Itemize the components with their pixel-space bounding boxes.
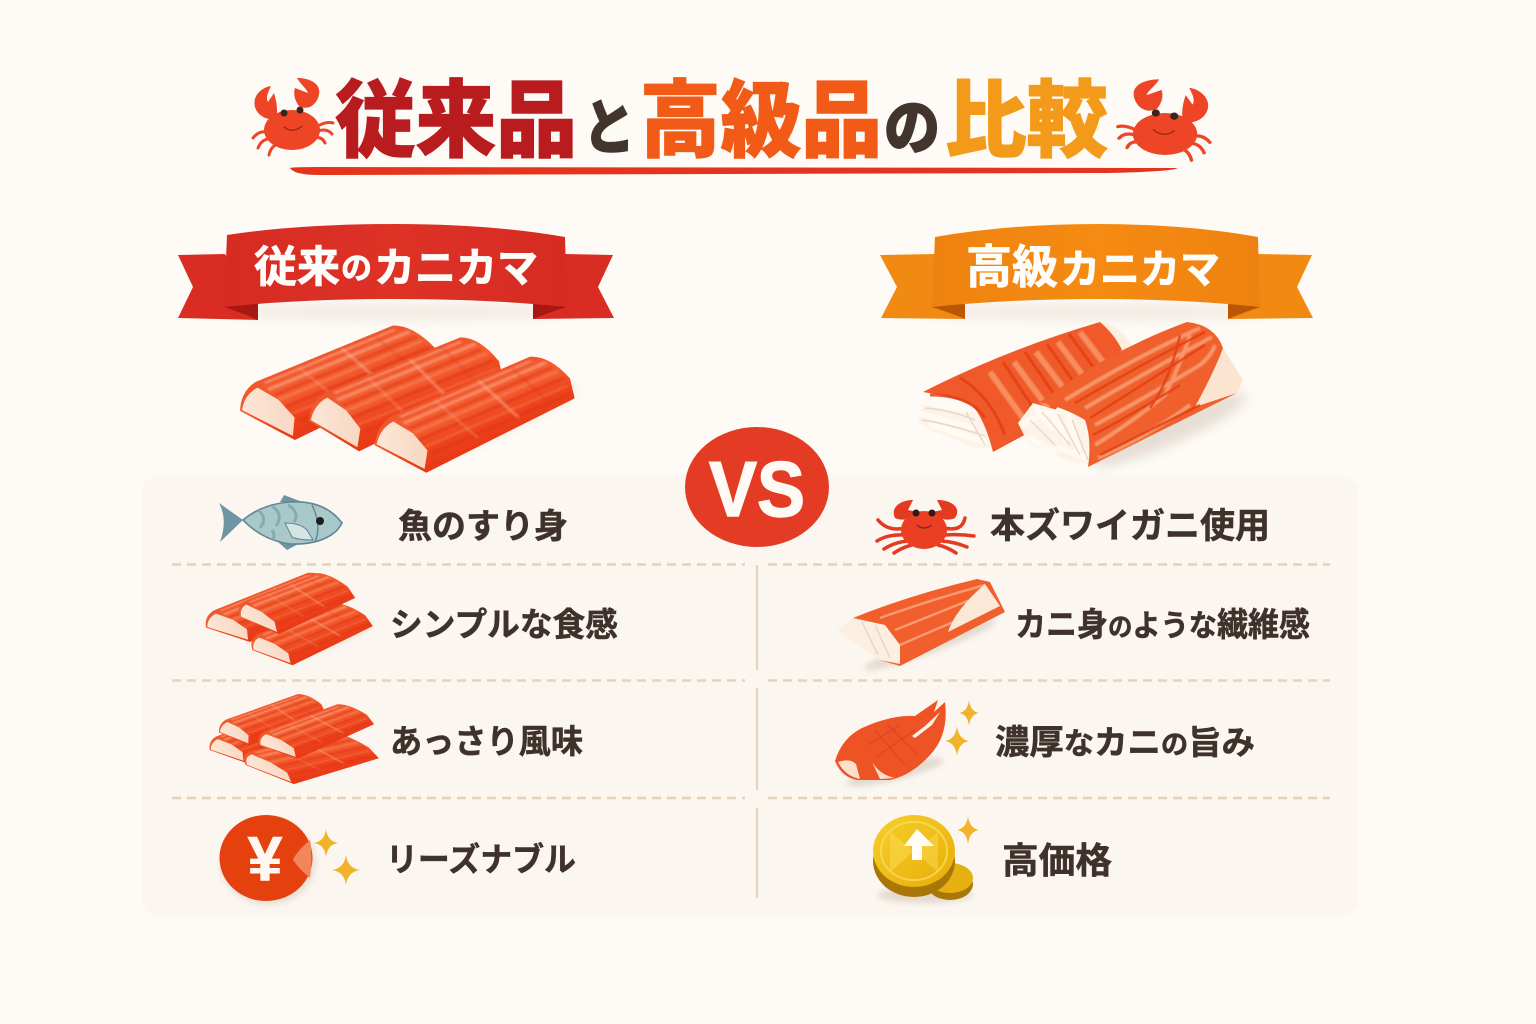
title icon: right crab [1118, 79, 1210, 160]
row 2 left: text: シンプルな食感 [390, 606, 618, 643]
ribbon text: conventional: 従来 [254, 244, 340, 292]
row 4 left: text: リーズナブル [386, 841, 576, 878]
sparkle [957, 816, 979, 844]
ribbon: premium [880, 224, 1313, 320]
row 1 left: fish icon [219, 495, 342, 550]
row 4 left: yen coin icon with sparkles: ¥ [248, 825, 283, 894]
VS badge: VS [709, 445, 805, 533]
title text: no: の [884, 95, 940, 162]
sparkle [314, 829, 338, 857]
row 1 left: text: 魚のすり身 [398, 508, 568, 546]
title text: comparison: 比較 [945, 74, 1108, 168]
row 3 left: text: あっさり風味 [390, 723, 583, 760]
ribbon: conventional [178, 224, 614, 320]
VS badge [685, 427, 829, 547]
ribbon text: conventional: カニカマ [374, 245, 538, 291]
sparkle [332, 855, 360, 885]
sparkle [945, 726, 969, 756]
title [253, 74, 1210, 175]
row 1 right: text: 本ズワイガニ使用 [990, 506, 1270, 546]
row 2 right: premium stick icon [837, 579, 1005, 676]
row 3 right: crab claw icon with sparkles [835, 700, 979, 792]
title text: premium: 高級品 [640, 74, 882, 168]
title text: conventional: 従来品 [335, 74, 577, 168]
title icon: left crab [253, 78, 333, 155]
title text: to: と [583, 95, 635, 162]
ribbon text: premium: 高級カニカマ [966, 241, 1220, 293]
row 3 right: text: 濃厚なカニの旨み [995, 724, 1255, 762]
ribbon text: conventional: の [341, 251, 372, 286]
food image: conventional crab sticks [224, 320, 593, 480]
title underline [290, 167, 1178, 175]
row 3 left: crab stick icon [199, 692, 393, 787]
left premium stick [917, 322, 1132, 452]
row 4 left: yen coin icon with sparkles [220, 815, 360, 905]
row 4 right: text: 高価格 [1002, 840, 1112, 881]
row 1 right: crab icon [877, 500, 974, 553]
food image: premium crab sticks [917, 322, 1253, 477]
sparkle [959, 700, 979, 726]
row 4 right: gold coin icon [873, 815, 979, 903]
row 2 right: text: カニ身のような繊維感 [1015, 606, 1310, 643]
panel: comparison table [142, 475, 1358, 917]
row 2 left: crab stick icon [192, 569, 385, 669]
right premium stick [1018, 322, 1243, 467]
